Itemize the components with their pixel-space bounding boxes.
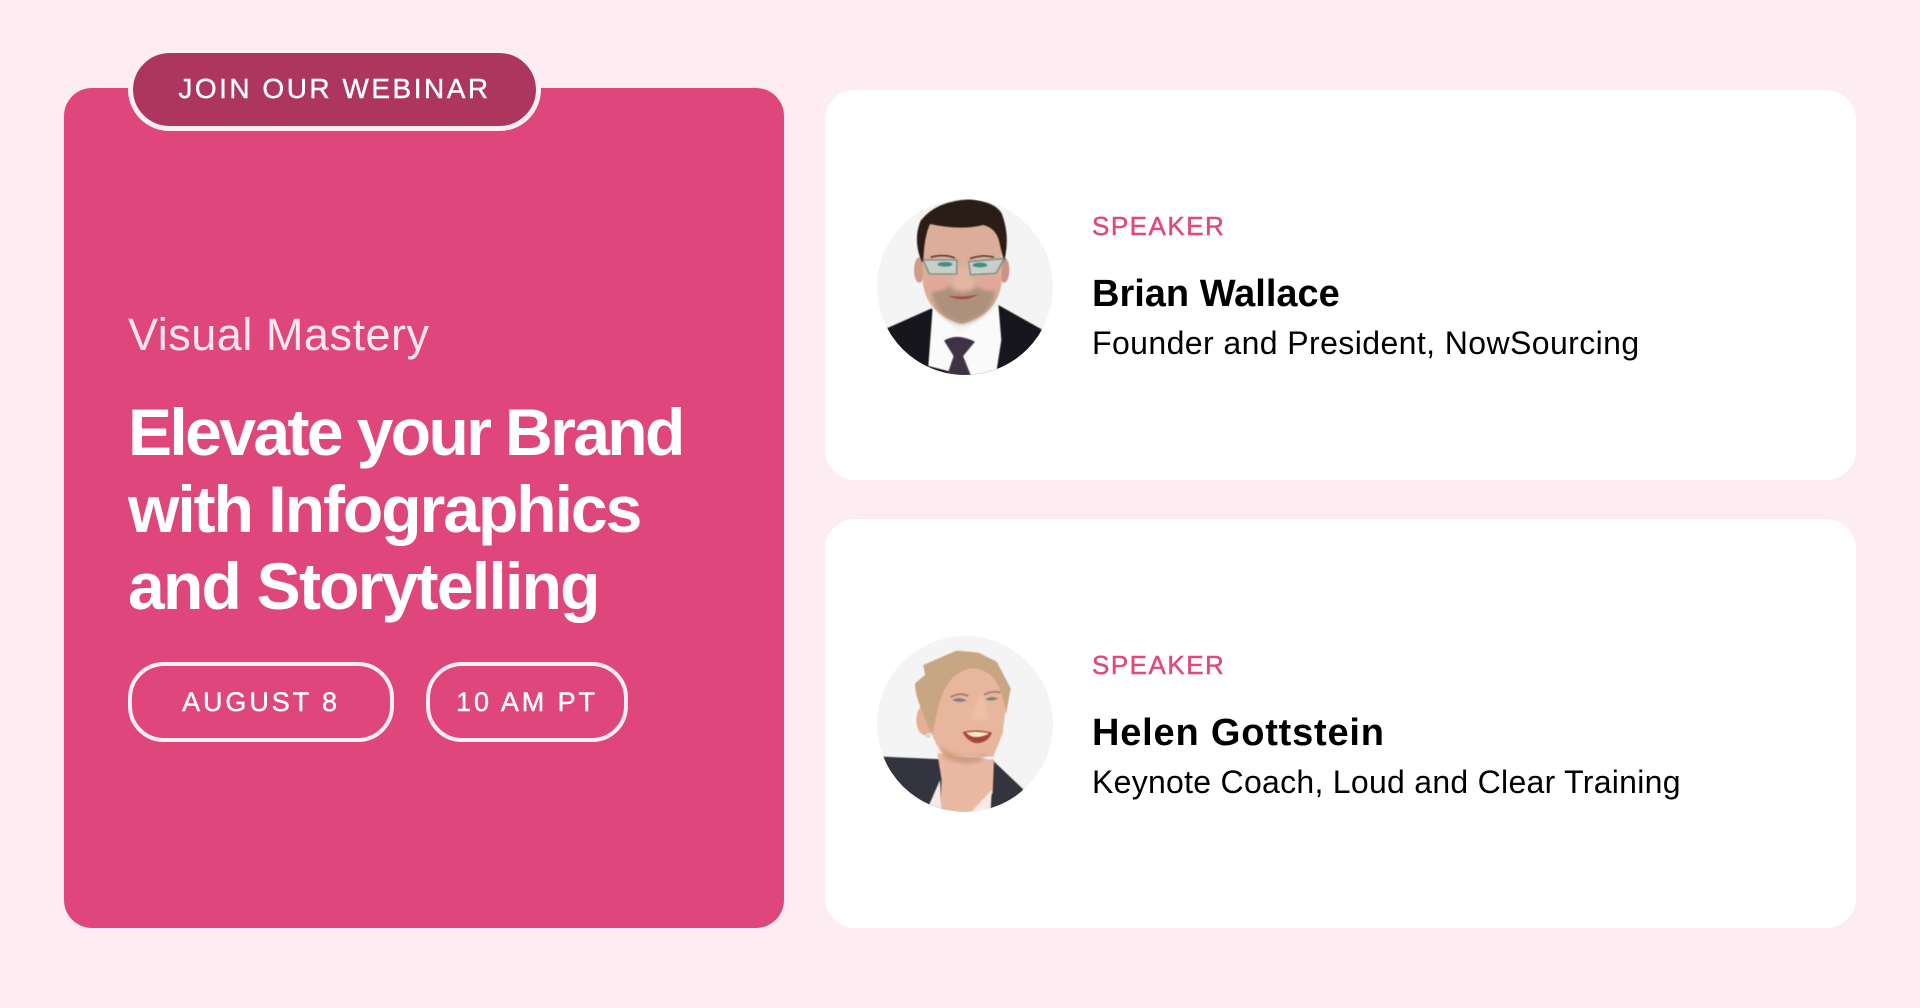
date pill	[128, 662, 394, 742]
label: speaker: SPEAKER	[1092, 650, 1225, 680]
panel: speaker Brian Wallace	[825, 90, 1856, 480]
badge: join our webinar: JOIN OUR WEBINAR	[178, 73, 491, 104]
date pill: AUGUST 8	[182, 687, 340, 717]
heading: and Storytelling	[128, 549, 599, 623]
speaker name: Helen Gottstein	[1092, 712, 1385, 754]
panel: speaker Helen Gottstein	[825, 519, 1856, 928]
icon: portrait of Helen Gottstein	[877, 636, 1053, 812]
speaker role: Founder and President, NowSourcing	[1092, 325, 1640, 361]
heading: with Infographics	[128, 472, 640, 546]
series name: Visual Mastery	[128, 309, 430, 360]
time pill: 10 AM PT	[456, 687, 598, 717]
panel: webinar info	[64, 88, 784, 928]
heading: Elevate your Brand	[128, 395, 683, 469]
time pill	[426, 662, 628, 742]
speaker role: Keynote Coach, Loud and Clear Training	[1092, 764, 1681, 800]
heading	[128, 395, 683, 623]
icon: portrait of Brian Wallace	[877, 199, 1053, 375]
label: speaker: SPEAKER	[1092, 211, 1225, 241]
badge: join our webinar	[128, 48, 541, 131]
speaker name: Brian Wallace	[1092, 273, 1340, 315]
